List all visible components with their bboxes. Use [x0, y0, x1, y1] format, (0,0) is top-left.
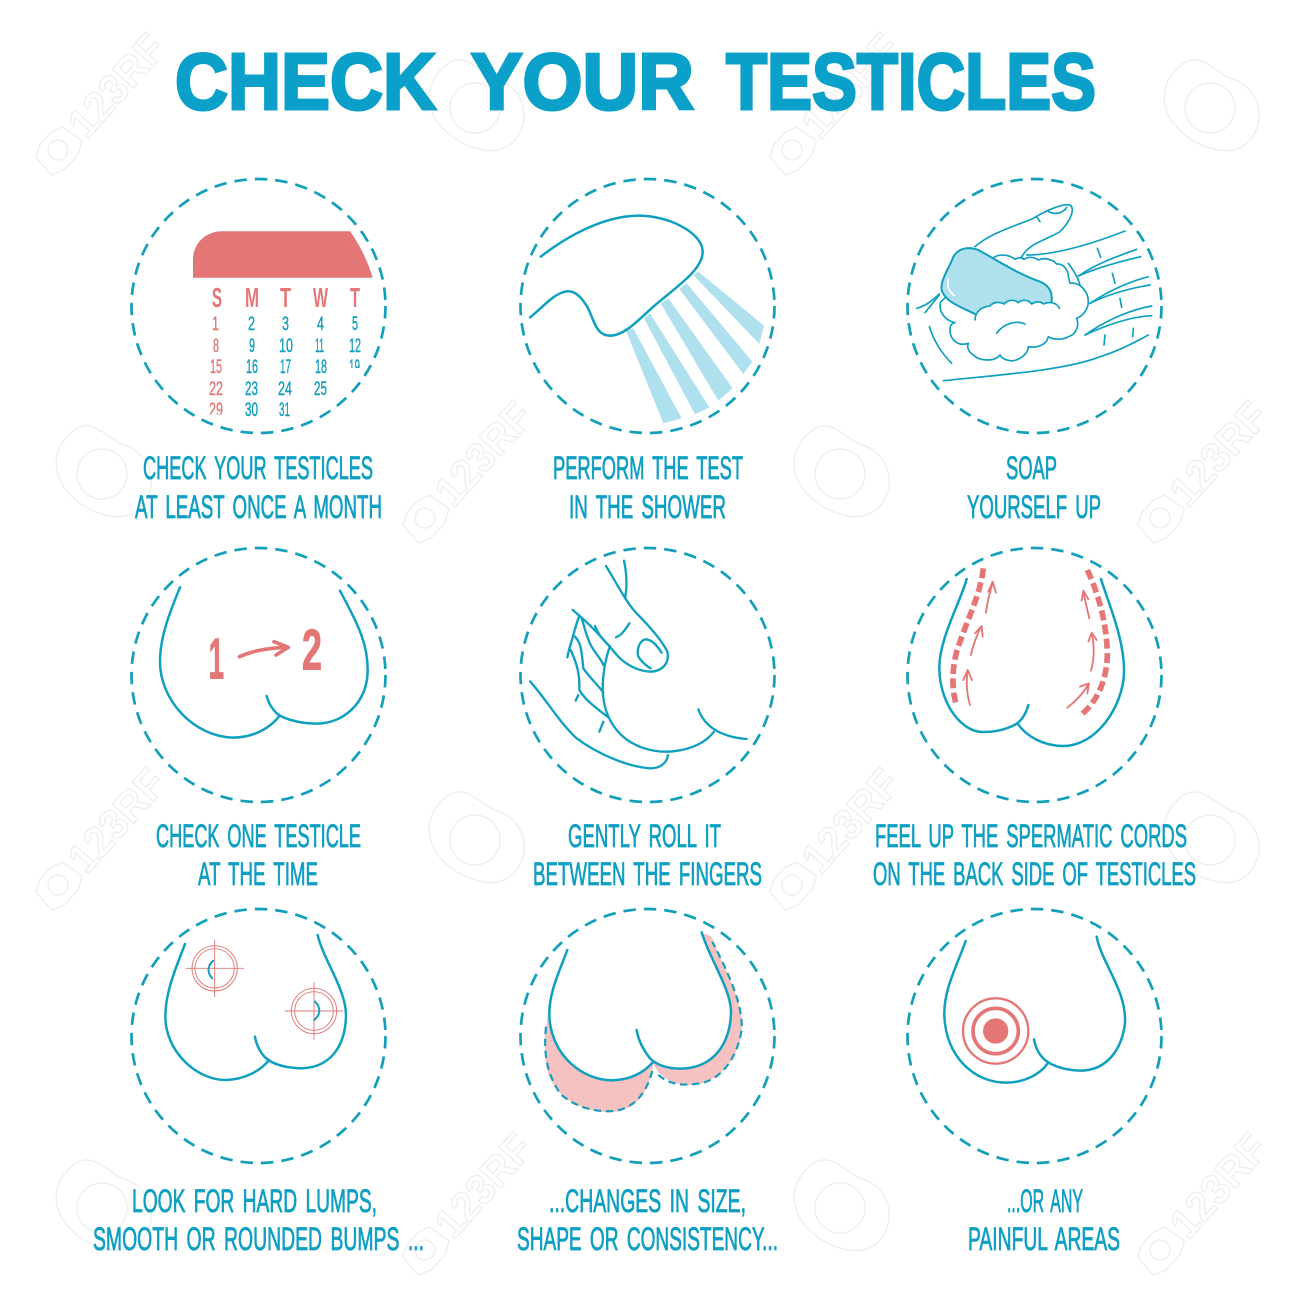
caption: changes: ...CHANGES IN SIZE,: [549, 1183, 746, 1219]
caption: check monthly: [135, 450, 382, 525]
icon: cords with arrows: [939, 568, 1124, 746]
caption: shower: [553, 450, 743, 525]
icon: calendar: 12: [349, 336, 361, 357]
panel: painful areas: [908, 909, 1162, 1257]
dashed circle: lumps: [132, 909, 386, 1163]
icon: calendar: 29: [209, 400, 223, 421]
icon: calendar: 19: [349, 357, 360, 378]
icon: anatomy with 1 to 2 arrow: 2: [302, 618, 322, 682]
caption: painful areas: PAINFUL AREAS: [968, 1221, 1120, 1257]
caption: painful areas: ...OR ANY: [1007, 1183, 1083, 1219]
panel: check monthly: [132, 179, 386, 525]
icon: calendar: 9: [249, 336, 255, 357]
panel: shower: [520, 179, 774, 525]
icon: calendar: 18: [315, 357, 327, 378]
icon: anatomy with 1 to 2 arrow: 1: [209, 627, 224, 691]
dashed circle: shower: [520, 179, 774, 433]
icon: fingers rolling: [530, 561, 747, 768]
icon: calendar: 1: [212, 314, 219, 335]
caption: changes: [517, 1183, 778, 1257]
text: 123RF: [425, 393, 542, 515]
icon: calendar: 25: [314, 379, 327, 400]
text: 123RF: [58, 760, 175, 882]
caption: spermatic cords: [873, 818, 1196, 892]
icon: anatomy with pain rings: [944, 937, 1125, 1083]
dashed circle: spermatic cords: [908, 548, 1162, 802]
caption: one at a time: CHECK ONE TESTICLE: [156, 818, 361, 854]
caption: roll between fingers: GENTLY ROLL IT: [568, 818, 721, 854]
caption: soap: [967, 450, 1101, 525]
icon: calendar: 5: [352, 314, 358, 335]
icon: calendar: M: [245, 282, 259, 313]
caption: shower: IN THE SHOWER: [569, 489, 726, 525]
text: 123RF: [1160, 1125, 1277, 1247]
caption: check monthly: AT LEAST ONCE A MONTH: [135, 489, 382, 525]
icon: calendar: T: [280, 282, 291, 313]
text: 123RF: [425, 1125, 542, 1247]
title: CHECK: [175, 37, 436, 126]
caption: roll between fingers: [533, 818, 762, 892]
icon: anatomy with shaded enlarged outline: [545, 932, 742, 1112]
title: [175, 37, 1096, 126]
icon: calendar: [193, 231, 373, 421]
panel: roll between fingers: [520, 548, 774, 892]
icon: soapy hand: [917, 205, 1152, 381]
panel: one at a time: [132, 548, 386, 892]
icon: calendar: 31: [279, 400, 290, 421]
caption: soap: SOAP: [1006, 450, 1057, 486]
panel: spermatic cords: [873, 548, 1196, 892]
icon: calendar: 11: [315, 336, 324, 357]
dashed circle: painful areas: [908, 909, 1162, 1163]
caption: lumps: [93, 1183, 424, 1257]
dashed circle: check monthly: [132, 179, 386, 433]
icon: calendar: S: [212, 282, 222, 313]
caption: roll between fingers: BETWEEN THE FINGERS: [533, 856, 762, 892]
caption: soap: YOURSELF UP: [967, 489, 1101, 525]
icon: calendar: 4: [317, 314, 324, 335]
icon: anatomy with 1 to 2 arrow: [160, 587, 368, 738]
caption: one at a time: [156, 818, 361, 892]
dashed circle: soap: [908, 179, 1162, 433]
icon: calendar: 2: [248, 314, 255, 335]
icon: calendar: 8: [213, 336, 219, 357]
panel: lumps: [93, 909, 424, 1257]
icon: calendar: T: [350, 282, 360, 313]
panel: soap: [908, 179, 1162, 525]
icon: calendar: 30: [245, 400, 258, 421]
caption: shower: PERFORM THE TEST: [553, 450, 743, 486]
icon: calendar: 23: [245, 379, 258, 400]
caption: changes: SHAPE OR CONSISTENCY...: [517, 1221, 778, 1257]
icon: calendar: 3: [282, 314, 289, 335]
caption: lumps: LOOK FOR HARD LUMPS,: [132, 1183, 377, 1219]
caption: painful areas: [968, 1183, 1120, 1257]
text: 123RF: [792, 760, 909, 882]
text: 123RF: [58, 25, 175, 147]
dashed circle: one at a time: [132, 548, 386, 802]
icon: calendar: W: [313, 282, 328, 313]
dashed circle: roll between fingers: [520, 548, 774, 802]
icon: calendar: 24: [278, 379, 292, 400]
icon: calendar: 16: [246, 357, 258, 378]
caption: check monthly: CHECK YOUR TESTICLES: [143, 450, 373, 486]
title: YOUR: [471, 37, 694, 126]
icon: calendar: 10: [279, 336, 293, 357]
caption: one at a time: AT THE TIME: [198, 856, 318, 892]
icon: shower head with water: [530, 216, 764, 423]
icon: calendar: 17: [280, 357, 291, 378]
title: TESTICLES: [726, 37, 1096, 126]
caption: lumps: SMOOTH OR ROUNDED BUMPS ...: [93, 1221, 424, 1257]
dashed circle: changes: [520, 909, 774, 1163]
icon: calendar: 22: [209, 379, 223, 400]
text: 123RF: [1160, 393, 1277, 515]
icon: calendar: 15: [210, 357, 222, 378]
text: 123RF: [792, 25, 909, 147]
icon: anatomy with targets: [165, 935, 346, 1080]
panel: changes: [517, 909, 778, 1257]
